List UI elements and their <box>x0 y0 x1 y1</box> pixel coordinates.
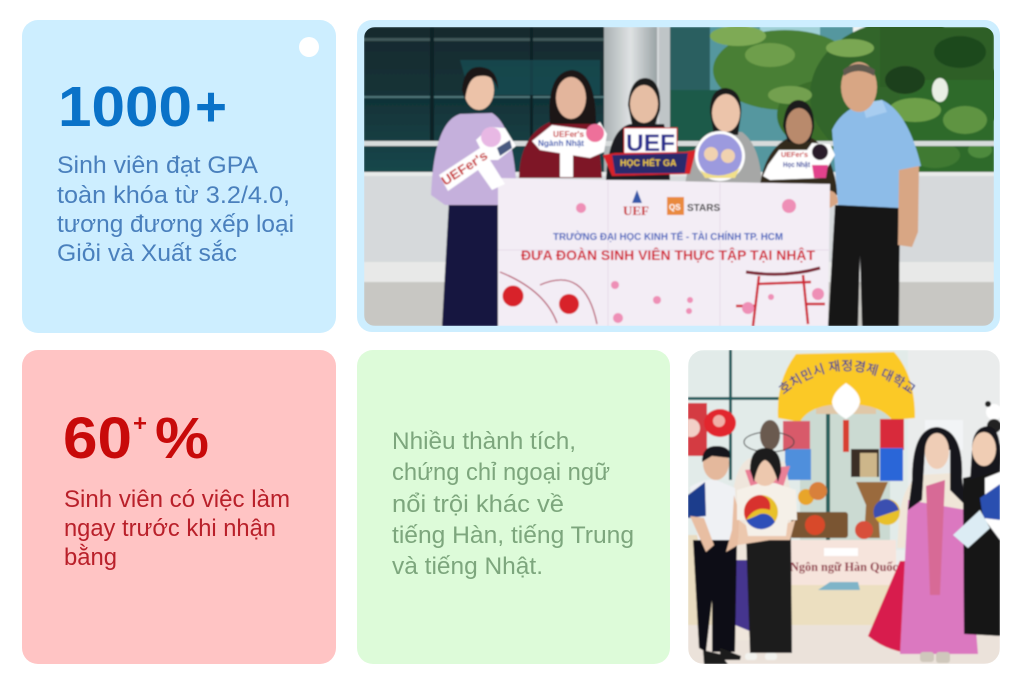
booth interior <box>800 405 890 540</box>
person 5 <box>760 100 838 195</box>
banner: ĐƯA ĐOÀN SINH VIÊN THỰC TẬP TẠI NHẬT <box>521 246 815 263</box>
panel: 60+% employment stat <box>22 350 336 664</box>
stat description: ngay trước khi nhận <box>64 515 276 542</box>
stat description: bằng <box>64 544 117 571</box>
banner Japan suns <box>500 272 597 324</box>
sign: UEFer's <box>438 127 516 191</box>
sign: Ngành Nhật: UEFer's <box>553 130 585 139</box>
stat description: Giỏi và Xuất sắc <box>57 240 237 267</box>
masks and drum display <box>790 449 900 539</box>
student in hanbok <box>868 427 978 663</box>
photo: Korean language booth <box>688 350 1000 664</box>
sign: UEFer's: UEFer's <box>438 148 490 189</box>
achievements text: Nhiều thành tích, <box>392 428 576 455</box>
person 1 <box>431 67 516 326</box>
stat number: 60+%: + <box>133 410 147 436</box>
stat number: 60+% <box>63 406 209 471</box>
stat description: Sinh viên có việc làm <box>64 486 290 513</box>
fan <box>744 495 778 529</box>
stat description: toàn khóa từ 3.2/4.0, <box>57 182 290 209</box>
person behind in hat <box>730 420 794 640</box>
banner logo QS Stars <box>667 197 720 215</box>
student in polo <box>688 446 741 664</box>
photo: group holding banner <box>364 20 1000 326</box>
banner torii gate <box>736 268 825 326</box>
sign: UEF Học hết ga: HỌC HẾT GA <box>620 158 677 168</box>
sign: UEF Học hết ga: UEF <box>626 130 675 157</box>
student in black with booklet <box>953 426 1000 636</box>
hanging fabrics <box>783 419 904 481</box>
achievements text: tiếng Hàn, tiếng Trung <box>392 522 634 549</box>
achievements text: và tiếng Nhật. <box>392 553 543 580</box>
sign: UEF Học hết ga <box>603 128 696 176</box>
yellow arch with Korean text: 호치민시 재정경제 대학교 <box>778 358 916 395</box>
sign: Học Nhật: UEFer's <box>781 150 808 159</box>
achievements text: nổi trội khác về <box>392 491 564 518</box>
banner logo QS Stars: QS <box>669 203 681 212</box>
stat description: Sinh viên đạt GPA <box>57 152 258 179</box>
booth table with sign <box>790 540 898 625</box>
sign: Ngành Nhật: Ngành Nhật <box>538 138 584 148</box>
panel: group photo frame <box>357 20 1000 332</box>
panda toy <box>985 401 1002 433</box>
banner logo UEF <box>623 190 649 218</box>
stat description <box>57 152 294 267</box>
tree foliage <box>710 20 1000 175</box>
sign: Ngành Nhật <box>532 122 607 177</box>
student with fan <box>737 448 798 660</box>
person 3 <box>606 78 670 180</box>
achievements text: chứng chỉ ngoại ngữ <box>392 459 610 486</box>
banner text lines: TRƯỜNG ĐẠI HỌC KINH TẾ - TÀI CHÍNH TP. HCM <box>553 230 783 243</box>
person 2 <box>519 70 602 178</box>
sign: Học Nhật <box>763 143 835 180</box>
banner logo QS Stars: STARS <box>687 203 720 214</box>
sign: round cartoon <box>695 131 745 181</box>
stat number: 60+%: % <box>155 406 209 471</box>
banner <box>498 178 830 326</box>
stat number: 60+%: 60 <box>63 406 132 471</box>
red banner and lantern <box>682 403 736 456</box>
achievements text <box>392 428 634 580</box>
booth table with sign: Ngôn ngữ Hàn Quốc <box>790 560 898 574</box>
decorative white dot <box>299 37 319 57</box>
panel: language achievements <box>357 350 670 664</box>
banner blossoms <box>576 199 824 323</box>
yellow arch with Korean text <box>776 351 916 453</box>
stat number: 1000+: 1000 <box>58 75 192 139</box>
person 4 <box>685 88 762 185</box>
panel: 1000+ students stat <box>22 20 336 333</box>
person 6 <box>824 62 921 326</box>
stat description: tương đương xếp loại <box>57 211 294 238</box>
banner logo UEF: UEF <box>623 203 649 218</box>
stat number: 1000+: + <box>195 75 227 139</box>
stat description <box>64 486 290 571</box>
sign: Học Nhật: Học Nhật <box>783 160 810 169</box>
